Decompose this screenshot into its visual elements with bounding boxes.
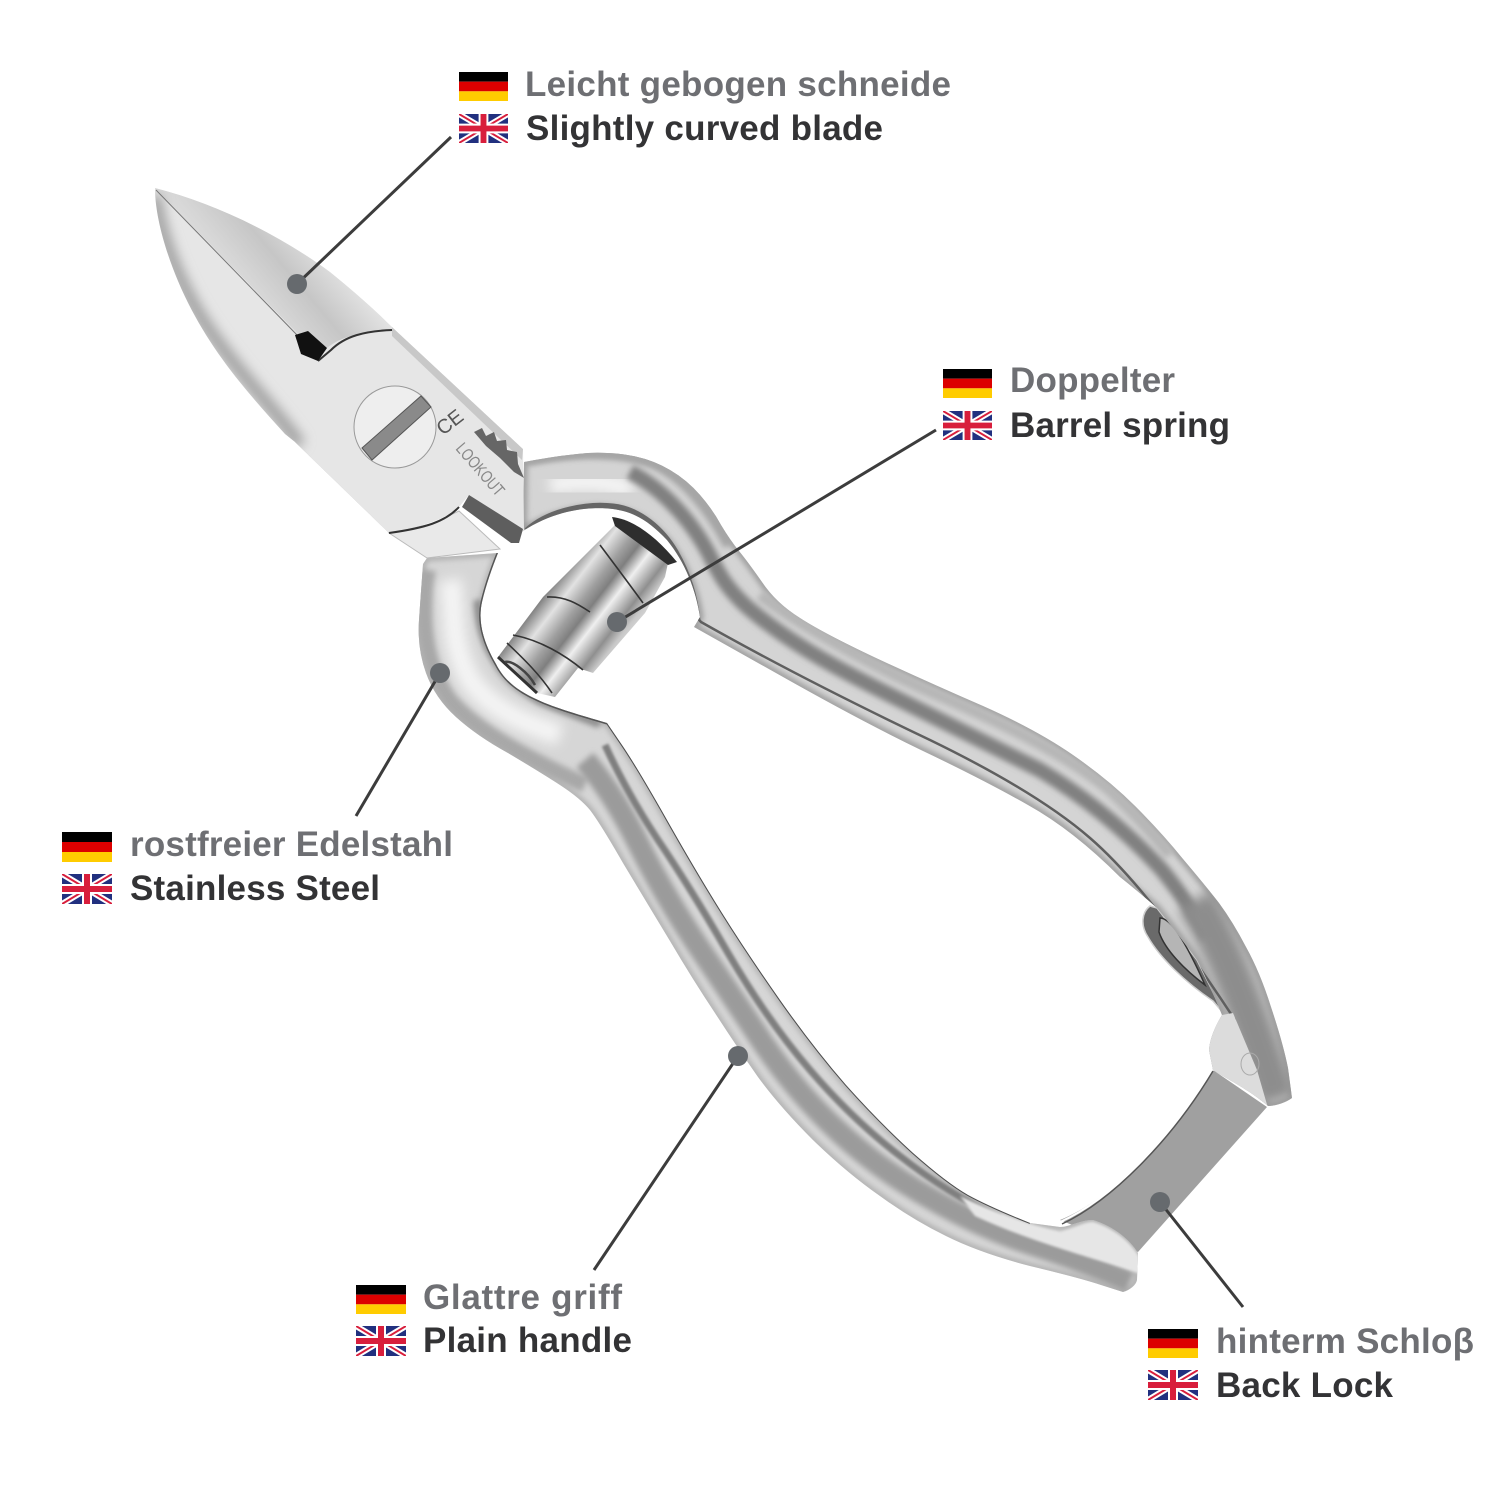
leader line: back lock (1150, 1192, 1243, 1307)
spring seat shadow (612, 517, 677, 565)
right handle (523, 452, 1292, 1108)
callout: stainless steel (62, 825, 453, 908)
callout: barrel spring (943, 361, 1230, 445)
callout: back lock: hinterm Schloβ (1216, 1322, 1474, 1361)
callout: barrel spring: Doppelter (1010, 361, 1175, 400)
barrel spring (498, 525, 668, 697)
callout: back lock (1148, 1322, 1474, 1405)
brand engraving (452, 428, 524, 500)
illustration: nail nipper (155, 188, 1292, 1292)
callout: slightly curved blade: Leicht gebogen schneide (525, 65, 951, 104)
blade notch (295, 331, 327, 361)
left handle (419, 553, 1140, 1292)
lower jaw plate (389, 511, 500, 558)
back lock plate (1060, 1070, 1267, 1252)
callout: slightly curved blade (459, 65, 951, 148)
leader line: barrel spring (607, 430, 936, 632)
callout: back lock: Back Lock (1216, 1366, 1394, 1405)
pivot screw (354, 386, 436, 468)
callout: barrel spring: Barrel spring (1010, 406, 1230, 445)
callout: stainless steel: rostfreier Edelstahl (130, 825, 453, 864)
leader line: stainless steel (356, 663, 450, 816)
callout: plain handle (356, 1278, 632, 1360)
callout: plain handle: Glattre griff (423, 1278, 622, 1317)
callout: plain handle: Plain handle (423, 1321, 632, 1360)
callout: stainless steel: Stainless Steel (130, 869, 380, 908)
serrated joint detail (462, 495, 523, 543)
lock spring loop (1143, 906, 1224, 1014)
leader line: plain handle (594, 1046, 748, 1270)
CE mark: CE (433, 405, 468, 440)
jaw head and blade (155, 188, 524, 545)
brand engraving: LOOKOUT (452, 439, 508, 500)
callout: slightly curved blade: Slightly curved blade (526, 109, 883, 148)
leader line: blade (287, 137, 451, 294)
